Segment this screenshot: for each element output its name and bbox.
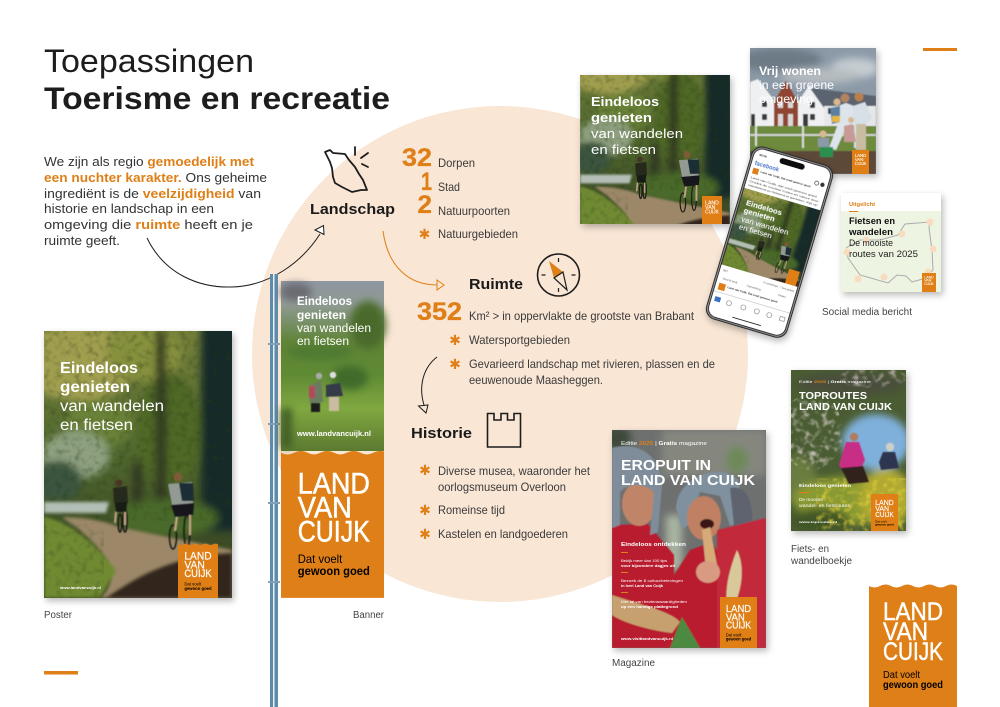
social post: forest square: en fietsen xyxy=(591,142,656,157)
poster: Eindeloos xyxy=(60,360,138,377)
booklet xyxy=(777,368,912,532)
list: historie: ✱ xyxy=(419,463,431,479)
list: historie: ✱ xyxy=(419,503,431,519)
magazine: EROPUIT IN xyxy=(621,458,711,474)
magazine: Bekijk meer dan 100 tips xyxy=(621,559,667,563)
icon: compass xyxy=(538,254,580,296)
list: historie: Diverse musea, waaronder het xyxy=(438,464,591,478)
stats: landschap: ✱ xyxy=(419,227,430,243)
banner: Eindeloos xyxy=(297,296,352,308)
phone mockup xyxy=(697,142,839,341)
logo on booklet: VAN xyxy=(875,504,889,513)
banner xyxy=(280,281,387,598)
magazine: voor bijzondere dagjes uit xyxy=(621,564,676,568)
logo: Land van Cuijk: Dat voelt xyxy=(883,670,920,681)
social post: forest square xyxy=(562,30,741,251)
intro paragraph xyxy=(44,154,267,248)
phone mockup: Land van Cuijk. Dat voelt gewoon goed xyxy=(760,170,811,188)
logo on map: VAN xyxy=(924,278,932,283)
background circle xyxy=(252,106,748,602)
logo on banner: VAN xyxy=(298,491,352,524)
booklet: www.toproutes.nl xyxy=(797,520,837,524)
caption: banner: Banner xyxy=(353,610,385,621)
logo on magazine: Dat voelt xyxy=(726,633,742,637)
social post: routes map: routes van 2025 xyxy=(849,249,918,259)
accent bar bottom left xyxy=(44,671,78,674)
magazine: Editie 2025 | Gratis magazine xyxy=(621,441,707,447)
social post: forest square: van wandelen xyxy=(591,126,683,141)
logo on magazine xyxy=(720,597,757,648)
phone mockup: Vind ik leuk xyxy=(722,276,738,285)
heading: Landschap: Landschap xyxy=(310,201,395,218)
magazine xyxy=(603,426,766,648)
list: historie: oorlogsmuseum Overloon xyxy=(438,480,566,494)
stats: ruimte: ✱ xyxy=(449,333,461,349)
logo on houses: VAN xyxy=(855,157,864,163)
intro paragraph: ruimte geeft. xyxy=(44,233,120,248)
stats: ruimte xyxy=(417,298,715,387)
logo on poster: CUIJK xyxy=(184,568,212,580)
logo on poster xyxy=(178,544,218,598)
booklet: Eindeloos genieten xyxy=(799,483,851,489)
stats: ruimte: Km² > in oppervlakte de grootste van Brabant xyxy=(469,309,695,323)
social post: routes map: De mooiste xyxy=(849,238,893,248)
phone mockup: Delen xyxy=(778,293,787,299)
booklet: De mooiste xyxy=(799,497,824,502)
logo: Land van Cuijk: CUIJK xyxy=(883,638,943,666)
poster: www.landvancuijk.nl xyxy=(59,585,101,590)
phone mockup: van wandelen xyxy=(740,216,789,237)
magazine: in heel Land van Cuijk xyxy=(621,584,663,588)
arrow: ruimte to historie xyxy=(418,357,437,413)
phone mockup: Land van Cuijk. Dat voelt gewoon goed xyxy=(727,285,778,304)
stats: landschap: 2 xyxy=(418,191,432,219)
intro paragraph: We zijn als regio gemoedelijk met xyxy=(44,154,255,169)
list: historie: ✱ xyxy=(419,527,431,543)
logo on booklet: LAND xyxy=(875,498,894,507)
logo on square: VAN xyxy=(705,205,715,211)
logo on banner xyxy=(281,450,384,598)
phone mockup: 567 xyxy=(723,268,729,274)
poster: van wandelen xyxy=(60,398,164,415)
banner: van wandelen xyxy=(297,323,371,335)
logo on booklet xyxy=(871,494,898,531)
social post: houses: in een groene xyxy=(759,78,834,92)
magazine: Eindeloos ontdekken xyxy=(621,542,687,548)
phone mockup: facebook xyxy=(754,160,780,174)
logo on houses: CUIJK xyxy=(855,161,867,167)
arrow: intro to landschap xyxy=(147,226,324,287)
phone mockup: genieten xyxy=(743,208,775,223)
arrow: landschap to ruimte xyxy=(383,231,444,290)
magazine: www.visitlandvancuijk.nl xyxy=(620,636,673,641)
magazine: Met tal van bezienswaardigheden xyxy=(621,600,687,604)
social post: houses: Vrij wonen xyxy=(759,64,821,78)
phone mockup: Opmerking xyxy=(746,284,762,292)
stats: landschap xyxy=(402,144,518,243)
caption: booklet: wandelboekje xyxy=(790,556,852,567)
logo on magazine: VAN xyxy=(726,613,745,623)
logo on magazine: LAND xyxy=(726,604,751,615)
icon: landschap map xyxy=(325,147,368,192)
social post: houses xyxy=(738,48,879,174)
banner: en fietsen xyxy=(297,336,349,348)
phone mockup: 21 opmerkingen · 7 keer gedeeld xyxy=(763,280,795,293)
social post: routes map: Fietsen en xyxy=(849,216,895,226)
phone mockup: en fietsen xyxy=(738,224,773,240)
magazine: Bezoek de 8 cultuurbelevingen xyxy=(621,579,683,583)
title: Toepassingen xyxy=(44,43,254,79)
heading: Ruimte: Ruimte xyxy=(469,276,523,293)
social post: houses: omgeving xyxy=(759,92,813,106)
logo on magazine: gewoon goed xyxy=(726,637,752,642)
stats: ruimte: Gevarieerd landschap met rivieren, plassen en de xyxy=(469,357,715,371)
phone mockup: wandelend en fietsend te genieten. Kijk op xyxy=(748,183,819,207)
social post: routes map: Uitgelicht xyxy=(849,202,875,208)
social post: forest square: genieten xyxy=(591,110,652,125)
stats: ruimte: Watersportgebieden xyxy=(469,333,570,347)
intro paragraph: een nuchter karakter. Ons geheime xyxy=(44,170,267,185)
caption: magazine: Magazine xyxy=(612,658,655,669)
accent bar top right xyxy=(923,48,957,51)
magazine: LAND VAN CUIJK xyxy=(621,473,756,489)
stats: ruimte: ✱ xyxy=(449,357,461,373)
logo on square: LAND xyxy=(705,200,719,206)
logo on map: LAND xyxy=(924,275,934,280)
logo: Land van Cuijk: gewoon goed xyxy=(883,680,943,691)
list: historie xyxy=(419,463,591,543)
title: Toerisme en recreatie xyxy=(44,80,390,116)
stats: landschap: Stad xyxy=(438,180,460,194)
logo on booklet: Dat voelt xyxy=(875,520,887,524)
list: historie: Kastelen en landgoederen xyxy=(438,527,568,541)
stats: landschap: 32 xyxy=(402,144,432,172)
logo on map: CUIJK xyxy=(924,281,934,286)
icon: castle xyxy=(488,414,520,447)
intro paragraph: historie en landschap in een xyxy=(44,201,214,216)
logo: Land van Cuijk xyxy=(869,584,957,707)
caption: social media: Social media bericht xyxy=(822,307,912,318)
heading: Historie: Historie xyxy=(411,425,472,442)
social post: routes map xyxy=(841,193,941,292)
logo on booklet: CUIJK xyxy=(875,510,894,519)
logo on banner: gewoon goed xyxy=(298,564,370,578)
poster xyxy=(21,321,246,598)
banner: www.landvancuijk.nl xyxy=(296,429,371,438)
phone mockup: 08:56 xyxy=(759,153,768,159)
caption: booklet xyxy=(790,544,852,567)
banner: genieten xyxy=(297,310,346,322)
social post: routes map: wandelen xyxy=(848,227,893,237)
booklet: wandel- en fietsroutes xyxy=(799,503,851,508)
logo: Land van Cuijk: VAN xyxy=(883,618,928,646)
logo on poster: VAN xyxy=(184,559,205,571)
logo on square xyxy=(702,196,722,224)
intro paragraph: omgeving die ruimte heeft en je xyxy=(44,217,253,232)
intro paragraph: ingrediënt is de veelzijdigheid van xyxy=(44,186,261,201)
list: historie: Romeinse tijd xyxy=(438,503,505,517)
phone mockup: Ontdek de mooiste routes en natuur door xyxy=(749,179,819,203)
flag pole xyxy=(268,274,280,707)
caption: poster: Poster xyxy=(44,610,73,621)
logo on banner: CUIJK xyxy=(298,516,370,549)
title xyxy=(44,43,390,116)
poster: genieten xyxy=(60,379,130,396)
notch xyxy=(779,157,805,170)
stats: ruimte: eeuwenoude Maasheggen. xyxy=(469,373,603,387)
caption: booklet: Fiets- en xyxy=(791,544,829,555)
booklet: TOPROUTES xyxy=(799,391,867,402)
stats: landschap: Dorpen xyxy=(438,156,475,170)
poster: en fietsen xyxy=(60,417,133,434)
magazine: op een handige plattegrond xyxy=(621,605,678,609)
logo on poster: LAND xyxy=(184,551,212,562)
logo on poster: Dat voelt xyxy=(184,582,202,587)
social post: forest square: Eindeloos xyxy=(591,94,659,109)
stats: ruimte: 352 xyxy=(417,298,462,326)
logo on banner: Dat voelt xyxy=(298,552,343,566)
logo on banner: LAND xyxy=(298,467,370,500)
logo on square: CUIJK xyxy=(705,209,719,215)
logo: Land van Cuijk: LAND xyxy=(883,598,943,626)
logo on magazine: CUIJK xyxy=(726,621,751,632)
logo on houses: LAND xyxy=(855,153,867,159)
logo on poster: gewoon goed xyxy=(184,586,212,591)
stats: landschap: Natuurpoorten xyxy=(438,204,510,218)
booklet: LAND VAN CUIJK xyxy=(799,402,893,413)
stats: landschap: Natuurgebieden xyxy=(438,227,518,241)
booklet: Editie 2025 | Gratis magazine xyxy=(799,379,872,384)
phone mockup: Land van Cuijk, dat voelt gewoon goed. xyxy=(750,175,819,199)
stats: landschap: 1 xyxy=(421,168,432,196)
logo on booklet: gewoon goed xyxy=(875,523,894,527)
phone mockup: Eindeloos xyxy=(745,200,783,217)
logo on houses xyxy=(852,150,869,174)
logo on map xyxy=(922,273,936,292)
